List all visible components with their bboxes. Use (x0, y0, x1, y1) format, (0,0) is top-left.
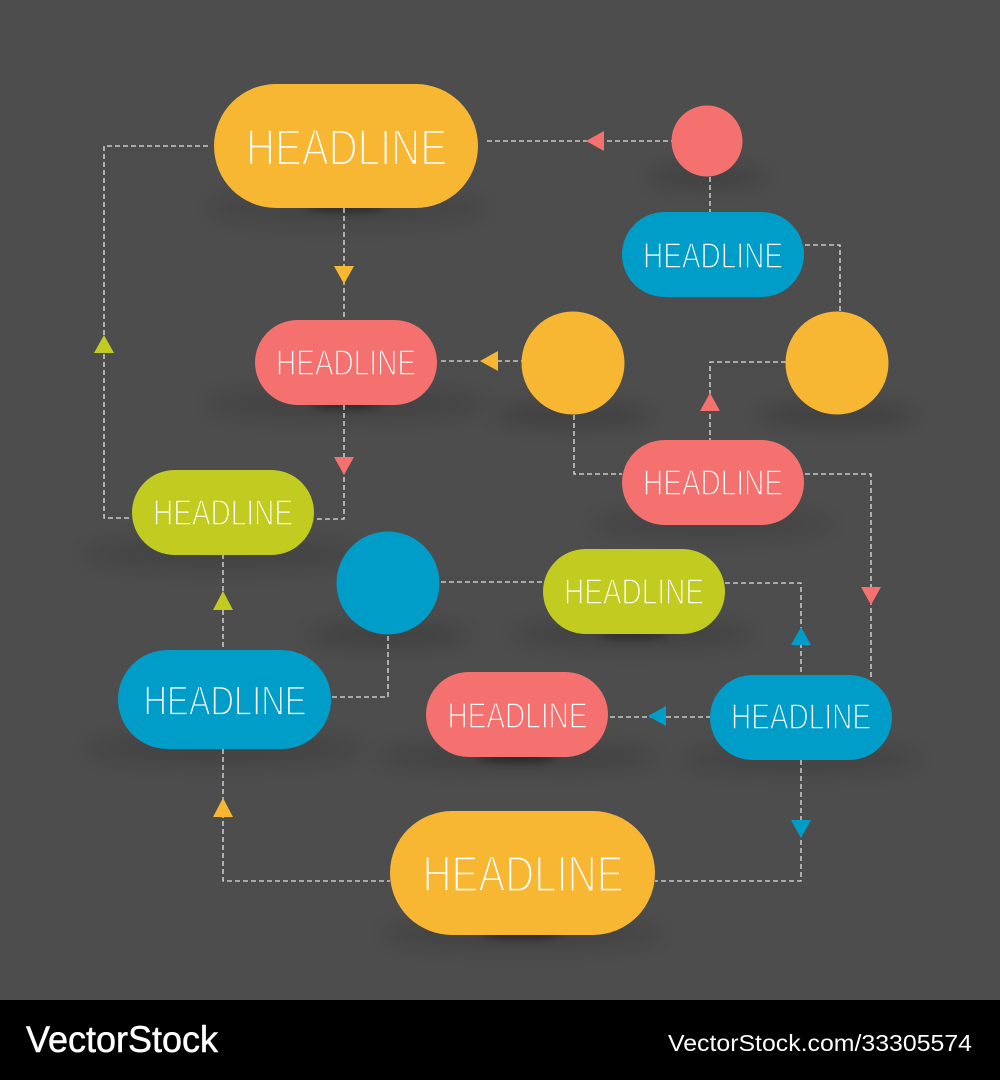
footer url: VectorStock.com/33305574 (668, 1030, 972, 1056)
node: red lower center (426, 672, 608, 757)
node: blue left (118, 650, 331, 749)
circle: red top (672, 106, 742, 176)
node: red right (622, 440, 804, 525)
node: blue left: HEADLINE (144, 677, 306, 724)
node: blue lower right (710, 675, 892, 760)
arrow: yellow down (334, 266, 354, 284)
node: green center: HEADLINE (564, 571, 704, 612)
footer logo text: VectorStock (26, 1019, 218, 1060)
node: bottom yellow headline: HEADLINE (422, 846, 624, 902)
arrow: red down center (334, 457, 354, 475)
node: top yellow headline: HEADLINE (246, 119, 447, 176)
node: red lower center: HEADLINE (448, 695, 588, 736)
node: red center left: HEADLINE (276, 342, 416, 383)
node: red center left (255, 320, 437, 405)
arrow: yellow up (213, 798, 233, 817)
arrow: red down right (861, 587, 881, 605)
arrow: green up left (94, 335, 114, 353)
arrow: blue left (648, 706, 666, 726)
node: red right: HEADLINE (643, 462, 783, 503)
circle: yellow right (786, 312, 888, 414)
arrow: blue down (791, 820, 811, 838)
arrow: green up (213, 591, 233, 610)
node: bottom yellow headline (390, 811, 655, 935)
circle: yellow center (522, 312, 624, 414)
circle: blue center (336, 532, 440, 634)
node: blue top right: HEADLINE (643, 235, 783, 276)
node: top yellow headline (214, 84, 478, 208)
dashed connectors (104, 141, 871, 881)
footer bar (0, 1000, 1000, 1080)
arrow: blue up (791, 627, 811, 645)
node: green left: HEADLINE (153, 492, 293, 533)
arrow: yellow left (480, 351, 498, 371)
node: green left (132, 470, 314, 555)
node: blue lower right: HEADLINE (731, 696, 871, 737)
node: green center (543, 549, 725, 634)
node: blue top right (622, 212, 804, 297)
arrow: top red left (586, 131, 604, 151)
shadows (83, 167, 921, 950)
arrow: red up (700, 393, 720, 411)
